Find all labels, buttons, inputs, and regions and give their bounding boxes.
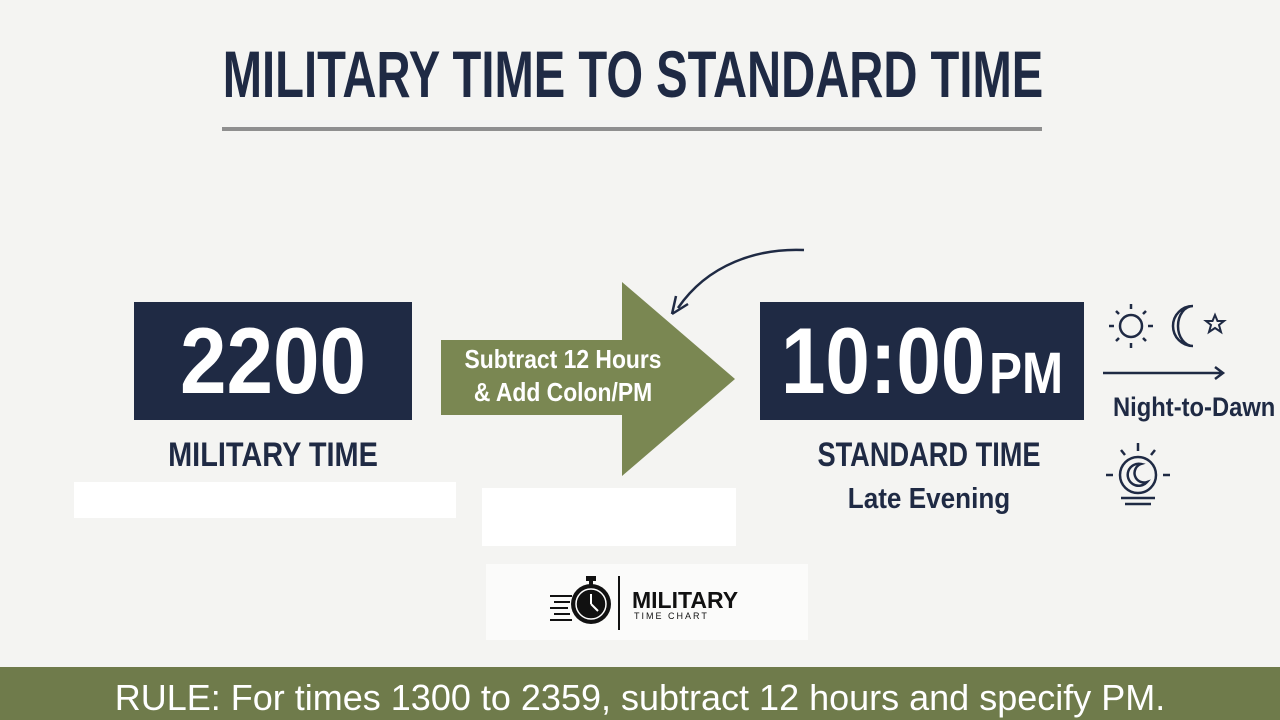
label military time: MILITARY TIME <box>168 436 378 474</box>
arrow: conversion <box>441 282 735 476</box>
arrow text <box>464 344 662 407</box>
icon: stopwatch <box>550 576 611 624</box>
rule bar <box>0 667 1280 720</box>
panel: standard time <box>760 302 1084 515</box>
logo <box>550 576 738 630</box>
standard time box: 10:00 PM <box>781 308 1063 413</box>
icon: sunrise moon <box>1106 443 1170 506</box>
title: MILITARY TIME TO STANDARD TIME <box>223 37 1043 111</box>
logo text: MILITARY <box>632 587 738 613</box>
military time box: 2200 <box>180 308 366 413</box>
logo: TIME CHART <box>634 611 709 621</box>
military time box <box>134 302 412 420</box>
rule text: RULE: For times 1300 to 2359, subtract 12 hours and specify PM. <box>115 677 1165 718</box>
curved arrow <box>670 248 804 315</box>
label late evening: Late Evening <box>848 483 1010 515</box>
white blocks <box>74 482 456 518</box>
icons: sun moon star <box>1109 304 1227 348</box>
arrow text: & Add Colon/PM <box>474 377 652 407</box>
title underline <box>222 127 1042 131</box>
label night-to-dawn: Night-to-Dawn <box>1113 392 1275 422</box>
arrow text: Subtract 12 Hours <box>464 344 662 374</box>
panel: military time <box>134 302 412 474</box>
arrow: night-to-dawn <box>1103 366 1225 380</box>
label standard time: STANDARD TIME <box>817 436 1041 474</box>
